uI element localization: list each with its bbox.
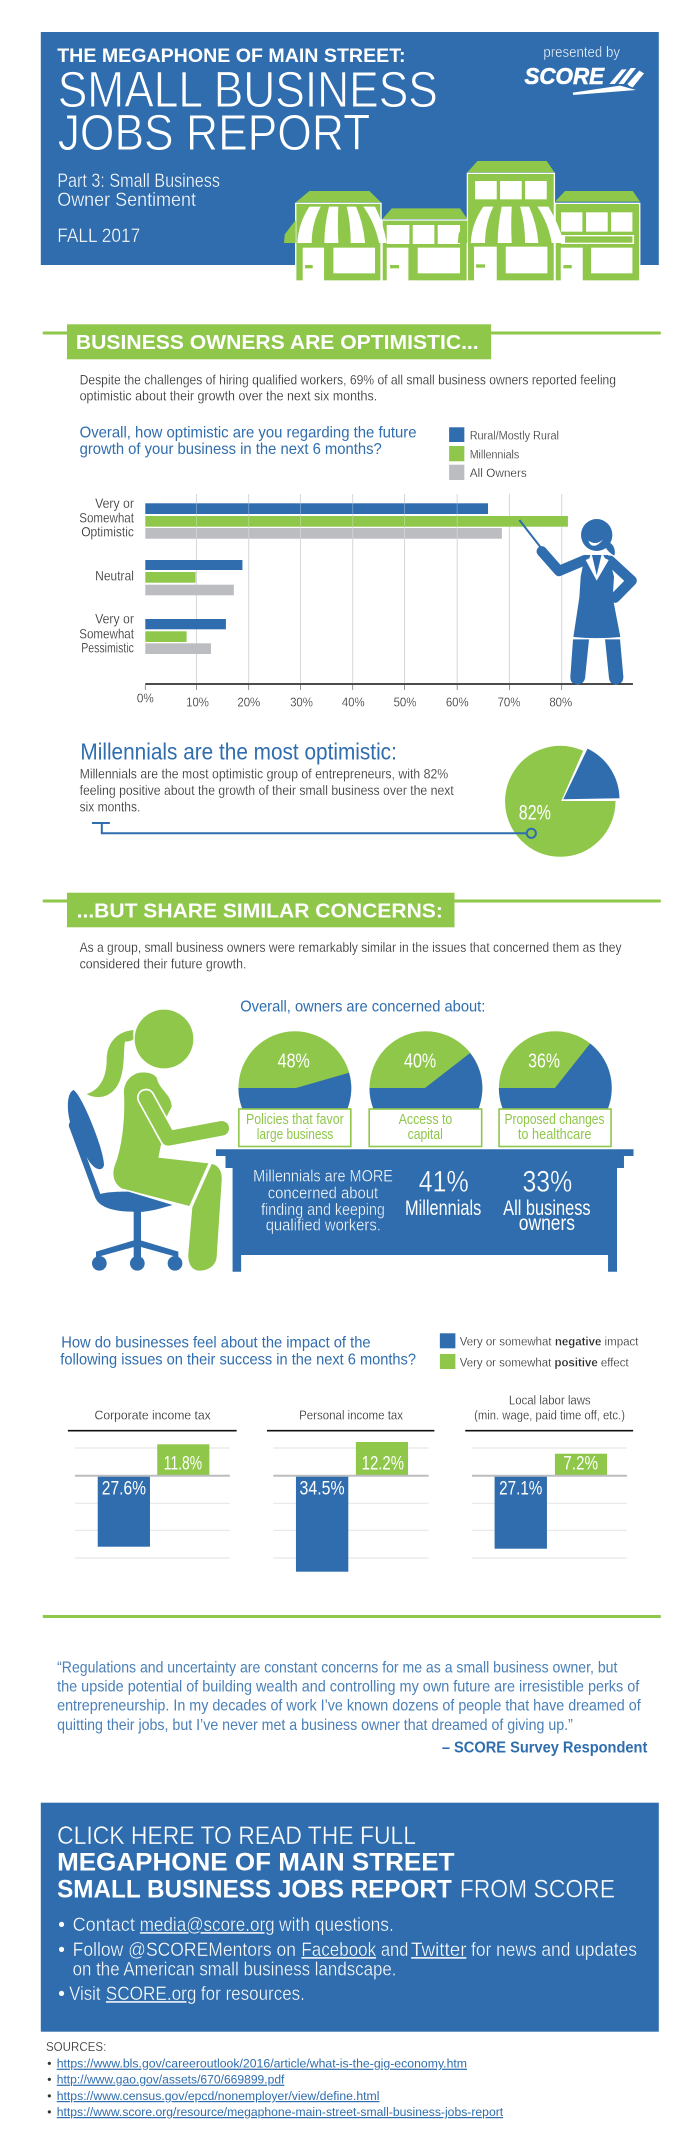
stat: 41% millennials: Millennials bbox=[405, 1197, 481, 1220]
chart: corporate income tax bbox=[68, 1407, 237, 1558]
row labels: Neutral bbox=[95, 569, 134, 584]
label box bbox=[239, 1109, 351, 1146]
legend: optimism chart: Rural/Mostly Rural bbox=[470, 428, 559, 442]
quote: “Regulations and uncertainty are constant concerns for me as a small business owner, but bbox=[57, 1659, 618, 1676]
title: jobs report: JOBS REPORT bbox=[58, 104, 370, 161]
row labels: Very or bbox=[95, 612, 134, 627]
label box: Access to bbox=[399, 1111, 452, 1128]
pie: proposed changes to healthcare 36%: 36% bbox=[528, 1051, 560, 1073]
cta bullet list: • bbox=[58, 1984, 65, 2005]
text: millennials more concerned: Millennials are MORE bbox=[253, 1168, 393, 1186]
label box: large business bbox=[257, 1126, 333, 1143]
legend: optimism chart: All Owners bbox=[470, 466, 527, 480]
cta bullet list: with questions. bbox=[278, 1915, 394, 1936]
cta bullet list: media@score.org bbox=[140, 1915, 275, 1936]
bars: neutral bbox=[145, 560, 242, 595]
label box: Proposed changes bbox=[505, 1111, 604, 1128]
stat: 33% all business owners bbox=[503, 1166, 591, 1235]
impact question: How do businesses feel about the impact of the bbox=[61, 1335, 371, 1352]
quote: the upside potential of building wealth and controlling my own future are irresistible perks of bbox=[57, 1679, 640, 1696]
pie: policies that favor large business 48% bbox=[238, 1031, 351, 1146]
icon: presenter woman with pointer bbox=[519, 519, 632, 684]
icon: SCORE logo bbox=[524, 63, 644, 95]
axis: 60% bbox=[446, 696, 469, 710]
quote attribution: – SCORE Survey Respondent bbox=[442, 1740, 647, 1757]
row labels: Somewhat bbox=[79, 511, 134, 526]
text block: millennials: feeling positive about the growth of their small business over the next bbox=[80, 783, 454, 798]
presented by label: presented by bbox=[543, 45, 621, 61]
cta bullet list: Facebook bbox=[301, 1940, 377, 1961]
chart: local labor laws: (min. wage, paid time off, etc.) bbox=[474, 1407, 625, 1422]
label box: to healthcare bbox=[518, 1126, 592, 1143]
chart: local labor laws bbox=[465, 1393, 633, 1558]
legend: optimism chart: Millennials bbox=[470, 447, 519, 461]
callout connector bbox=[92, 823, 536, 838]
chart: personal income tax: 12.2% bbox=[362, 1453, 404, 1474]
pie: access to capital 40%: 40% bbox=[404, 1051, 436, 1073]
chart question: growth of your business in the next 6 months? bbox=[80, 441, 382, 458]
axis: 50% bbox=[394, 696, 416, 710]
stat: 33% all business owners: 33% bbox=[522, 1166, 572, 1199]
subtitle: Part 3: Small Business bbox=[57, 170, 220, 192]
title: small business: SMALL BUSINESS bbox=[58, 61, 438, 118]
cta bullet list bbox=[58, 1915, 637, 2005]
heading: millennials most optimistic: Millennials are the most optimistic: bbox=[80, 738, 397, 764]
date: FALL 2017 bbox=[57, 225, 140, 247]
legend: impact: Very or somewhat positive effect bbox=[460, 1355, 629, 1369]
axis bbox=[137, 684, 633, 710]
icon: seated woman on office chair bbox=[68, 1010, 222, 1271]
section heading: share similar concerns: ...BUT SHARE SIMILAR CONCERNS: bbox=[77, 899, 443, 922]
subtitle bbox=[57, 170, 220, 211]
text block: millennials: six months. bbox=[80, 800, 140, 815]
text: millennials more concerned: finding and keeping bbox=[261, 1201, 385, 1219]
text block: concerns intro: As a group, small business owners were remarkably similar in the issues that concerned them as they bbox=[80, 940, 622, 955]
label box: Policies that favor bbox=[246, 1111, 344, 1128]
panel: call to action bbox=[41, 1803, 659, 2032]
panel: desk with millennial stats bbox=[216, 1149, 634, 1272]
cta heading: MEGAPHONE OF MAIN STREET bbox=[57, 1849, 454, 1877]
storefront 3 bbox=[458, 161, 564, 281]
legend: impact bbox=[440, 1333, 639, 1369]
cta bullet list: SCORE.org bbox=[106, 1984, 196, 2005]
bars: optimistic bbox=[145, 503, 568, 539]
quote bbox=[57, 1659, 647, 1757]
sources: • bbox=[47, 2073, 51, 2087]
chart: corporate income tax: 27.6% bbox=[102, 1478, 146, 1499]
stat: 41% millennials bbox=[405, 1166, 481, 1220]
axis: 10% bbox=[186, 696, 209, 710]
row labels: Pessimistic bbox=[81, 640, 134, 655]
text block: optimism intro: Despite the challenges of hiring qualified workers, 69% of all small business owners reported feeling bbox=[80, 372, 616, 387]
impact question bbox=[60, 1335, 416, 1368]
pie chart: millennials 82%: 82% bbox=[519, 801, 551, 824]
label box bbox=[499, 1109, 611, 1146]
subtitle: Owner Sentiment bbox=[57, 189, 197, 211]
sources: • bbox=[47, 2089, 51, 2103]
cta bullet list: • bbox=[58, 1940, 65, 1961]
row labels: Somewhat bbox=[79, 626, 134, 641]
label box bbox=[369, 1109, 482, 1146]
icon: main street storefronts bbox=[284, 161, 640, 281]
row labels: Very or bbox=[95, 496, 134, 511]
axis: 30% bbox=[290, 696, 313, 710]
cta bullet list: for resources. bbox=[201, 1984, 305, 2005]
bars: pessimistic bbox=[145, 619, 226, 654]
panel: header banner bbox=[41, 32, 659, 265]
cta heading: FROM SCORE bbox=[460, 1875, 615, 1903]
sources: https://www.census.gov/epcd/nonemployer/view/define.html bbox=[57, 2089, 379, 2103]
axis: 0% bbox=[137, 692, 154, 706]
sources: http://www.gao.gov/assets/670/669899.pdf bbox=[57, 2073, 285, 2087]
title: megaphone of main street: THE MEGAPHONE OF MAIN STREET: bbox=[57, 45, 406, 67]
cta bullet list: for news and updates bbox=[471, 1940, 637, 1961]
text block: millennials bbox=[80, 766, 454, 815]
stat: 41% millennials: 41% bbox=[419, 1166, 469, 1199]
section heading: business owners are optimistic: BUSINESS OWNERS ARE OPTIMISTIC... bbox=[76, 331, 479, 354]
chart question: Overall, how optimistic are you regarding the future bbox=[80, 424, 417, 441]
text block: concerns intro bbox=[80, 940, 622, 972]
chart question bbox=[80, 424, 417, 458]
label box: capital bbox=[408, 1126, 443, 1143]
chart: personal income tax bbox=[267, 1407, 434, 1572]
storefront 1 bbox=[284, 191, 381, 281]
sources: https://www.bls.gov/careeroutlook/2016/article/what-is-the-gig-economy.htm bbox=[57, 2057, 467, 2071]
text: millennials more concerned bbox=[253, 1168, 393, 1235]
pie: proposed changes to healthcare 36% bbox=[499, 1031, 612, 1146]
cta heading: SMALL BUSINESS JOBS REPORT bbox=[57, 1875, 452, 1903]
text block: millennials: Millennials are the most optimistic group of entrepreneurs, with 82% bbox=[80, 766, 448, 781]
sources: • bbox=[47, 2105, 51, 2119]
text: millennials more concerned: concerned about bbox=[268, 1184, 379, 1202]
text block: concerns intro: considered their future growth. bbox=[80, 957, 246, 972]
section heading: share similar concerns bbox=[43, 893, 661, 927]
chart: personal income tax: 34.5% bbox=[300, 1478, 345, 1499]
stat: 33% all business owners: All business bbox=[503, 1197, 591, 1220]
sources: • bbox=[47, 2057, 51, 2071]
cta bullet list: and bbox=[381, 1940, 409, 1961]
legend: optimism chart bbox=[449, 427, 559, 480]
chart: personal income tax: Personal income tax bbox=[299, 1407, 404, 1422]
pie: policies that favor large business 48%: 48% bbox=[278, 1051, 310, 1073]
storefront 2 bbox=[363, 207, 467, 281]
text block: optimism intro: optimistic about their growth over the next six months. bbox=[80, 389, 377, 404]
cta bullet list: Contact bbox=[73, 1915, 136, 1936]
sources: https://www.score.org/resource/megaphone-main-street-small-business-jobs-report bbox=[57, 2105, 504, 2119]
axis: 70% bbox=[498, 696, 520, 710]
section heading: business owners are optimistic bbox=[43, 324, 661, 359]
cta bullet list: • bbox=[58, 1915, 65, 1936]
chart: corporate income tax: Corporate income tax bbox=[95, 1407, 211, 1422]
chart: local labor laws: Local labor laws bbox=[509, 1393, 591, 1408]
pie chart: millennials 82% bbox=[505, 744, 623, 857]
legend: impact: Very or somewhat negative impact bbox=[460, 1335, 639, 1349]
impact question: following issues on their success in the next 6 months? bbox=[60, 1351, 416, 1368]
stat: 33% all business owners: owners bbox=[519, 1212, 575, 1235]
cta bullet list: Twitter bbox=[411, 1940, 467, 1961]
cta bullet list: Visit bbox=[69, 1984, 101, 2005]
row labels bbox=[79, 496, 134, 655]
chart: local labor laws: 27.1% bbox=[499, 1478, 542, 1499]
cta heading bbox=[57, 1822, 615, 1903]
heading: owners concerned about: Overall, owners are concerned about: bbox=[240, 999, 485, 1016]
sources: SOURCES: bbox=[46, 2039, 106, 2054]
row labels: Optimistic bbox=[81, 525, 134, 540]
cta bullet list: Follow @SCOREMentors on bbox=[73, 1940, 296, 1961]
storefront 4 bbox=[555, 191, 640, 281]
axis: 40% bbox=[342, 696, 365, 710]
icon: SCORE logo: SCORE bbox=[524, 63, 605, 89]
text: millennials more concerned: qualified workers. bbox=[266, 1217, 381, 1235]
bar chart: optimism bbox=[79, 494, 633, 710]
chart: local labor laws: 7.2% bbox=[563, 1453, 598, 1474]
chart: corporate income tax: 11.8% bbox=[164, 1453, 202, 1474]
axis: 80% bbox=[549, 696, 572, 710]
cta bullet list: on the American small business landscape. bbox=[73, 1960, 396, 1981]
cta heading: CLICK HERE TO READ THE FULL bbox=[57, 1822, 416, 1850]
pie: access to capital 40% bbox=[369, 1031, 482, 1146]
text block: optimism intro bbox=[80, 372, 616, 404]
quote: quitting their jobs, but I’ve never met a business owner that dreamed of giving up.” bbox=[57, 1717, 573, 1734]
axis: 20% bbox=[237, 696, 260, 710]
quote: entrepreneurship. In my decades of work I’ve known dozens of people that have dreamed of bbox=[57, 1698, 641, 1715]
sources bbox=[46, 2039, 504, 2119]
